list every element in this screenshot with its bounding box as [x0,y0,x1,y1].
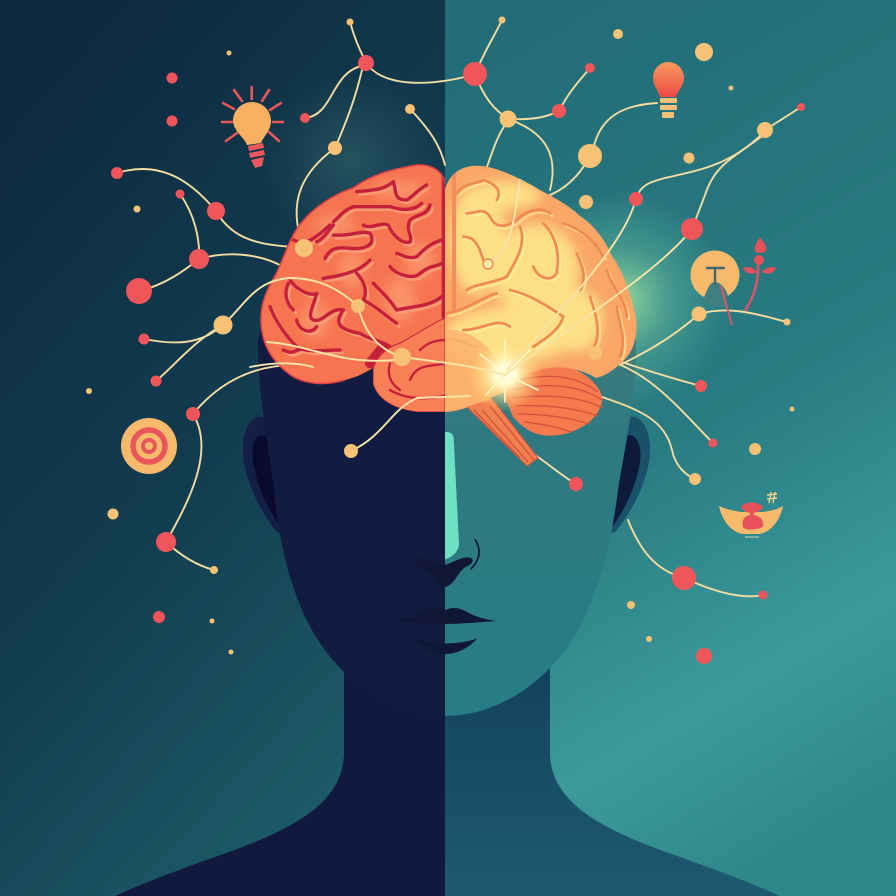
nose [416,539,479,587]
temporal lobe, right part [445,330,505,412]
head and shoulders [115,300,780,896]
icon: light bulb left [222,87,283,168]
glow behind dark brain [260,70,440,250]
face: left half [258,300,445,716]
right ear [604,417,650,534]
lips [395,607,497,624]
brain [261,163,636,466]
network lines over brain [223,180,692,451]
brain: left hemisphere [261,163,450,412]
icon: light bulb right [653,62,684,118]
network lines behind brain [117,20,801,596]
glow behind lit brain [510,190,730,410]
network nodes: red [111,55,805,664]
background: teal right half [445,0,896,896]
nose highlight [445,432,459,559]
background: dark left half [0,0,445,896]
brain: cerebellum [474,367,603,462]
temporal lobe, left part [373,318,450,412]
left ear [243,417,290,534]
neck and shoulders: left [115,640,445,896]
icon: boat with red emblem [719,492,783,537]
icon: red plant [743,237,776,311]
hot spot [467,336,543,412]
face: right half [445,300,636,716]
brain: stem [467,396,538,466]
lower lip [417,638,477,654]
network nodes: tan [86,16,794,654]
brain: right hemisphere [445,166,636,412]
icon: tool in circle [690,250,740,325]
icon: target [121,418,177,474]
neck and shoulders: right [445,640,780,896]
